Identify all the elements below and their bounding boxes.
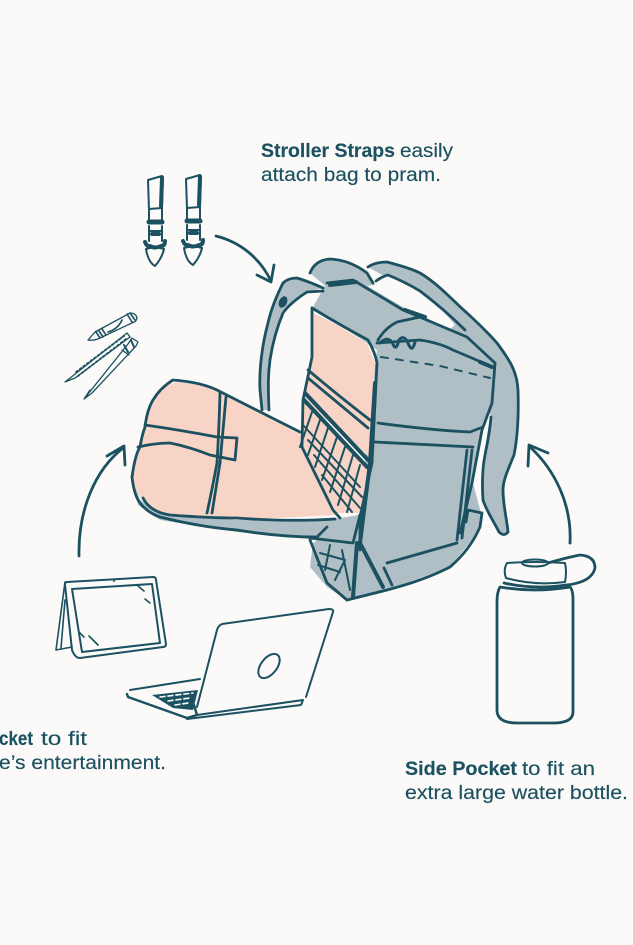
top handle grey xyxy=(310,259,375,290)
left shoulder strap xyxy=(260,278,323,410)
icon: water bottle xyxy=(497,555,595,723)
gap between handle and body xyxy=(376,275,455,329)
arrow: flap to devices xyxy=(79,446,125,556)
icon: crayon and pencils xyxy=(65,313,138,399)
text: side pocket caption xyxy=(405,758,628,804)
main body grey xyxy=(310,280,495,600)
illustration: backpack xyxy=(132,259,518,600)
text: side pocket caption: to fit an xyxy=(522,758,595,780)
arrow: water bottle to pocket xyxy=(528,445,570,543)
icon: stroller straps xyxy=(145,175,203,266)
icon: tablet xyxy=(56,577,166,658)
text: laptop pocket caption xyxy=(0,728,166,774)
text: stroller straps caption: easily xyxy=(400,140,453,162)
icon: laptop xyxy=(127,609,333,719)
peach inner panel xyxy=(303,313,375,457)
text: stroller straps caption: Stroller Straps xyxy=(261,140,395,162)
text: laptop pocket caption: to fit xyxy=(41,728,88,750)
text: stroller straps caption xyxy=(261,140,453,186)
text: stroller straps caption: attach bag to pram. xyxy=(261,164,441,186)
arrow: straps to bag xyxy=(216,236,274,282)
peach open flap xyxy=(133,382,335,520)
text: side pocket caption: extra large water bottle. xyxy=(405,782,628,804)
flap grey band xyxy=(133,480,360,540)
mesh pocket xyxy=(300,400,368,513)
text: side pocket caption: Side Pocket xyxy=(405,758,518,780)
text: laptop pocket caption: e’s entertainment. xyxy=(0,752,166,774)
back strap grey xyxy=(368,262,518,534)
text: laptop pocket caption: cket xyxy=(0,728,33,750)
